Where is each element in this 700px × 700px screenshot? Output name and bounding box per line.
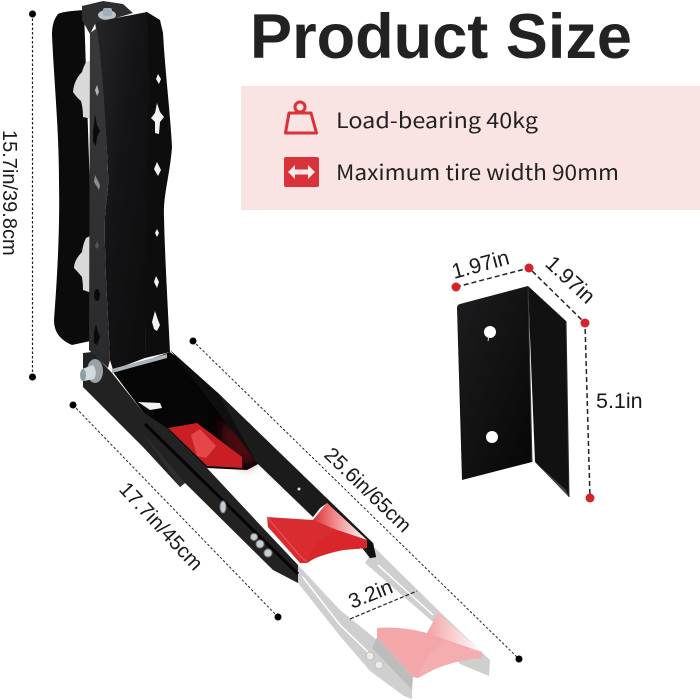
rail end tip — [367, 540, 376, 558]
silver tabs — [73, 60, 92, 293]
dimension: tire slot width — [345, 575, 417, 619]
column side strip — [89, 28, 110, 368]
white slot — [138, 402, 162, 410]
ghost red roller — [377, 613, 482, 678]
red reflection — [222, 418, 262, 468]
column right strip — [145, 12, 172, 358]
column front face — [95, 12, 149, 370]
slot in plate — [145, 424, 298, 574]
upper rail — [170, 350, 376, 558]
dimension: bracket measurements — [449, 245, 643, 502]
ghost left rail — [298, 565, 412, 699]
red roller front — [168, 423, 242, 468]
vertical column — [89, 12, 172, 370]
tire width text: Maximum tire width 90mm — [336, 157, 619, 187]
back plate — [52, 10, 95, 345]
horizontal arm — [80, 350, 376, 583]
sleeve step — [143, 412, 185, 487]
red roller middle — [267, 503, 367, 563]
dimension: collapsed arm length — [70, 402, 282, 620]
column holes left — [93, 85, 100, 345]
dimension: bracket measurements: 1.97in — [541, 251, 600, 309]
dimension: tire slot width: 3.2in — [345, 575, 396, 614]
top bracket and bolt — [82, 1, 133, 34]
arm bolts — [220, 501, 272, 557]
icon: tire width arrow — [284, 157, 319, 187]
bracket holes — [484, 326, 496, 338]
load-bearing text: Load-bearing 40kg — [336, 105, 538, 135]
ghost right rail — [365, 548, 490, 676]
icon: weight — [286, 102, 316, 133]
axle rod — [112, 354, 167, 373]
small L bracket — [457, 286, 569, 497]
ghost bolts — [366, 652, 383, 669]
dimension: bracket measurements: 1.97in — [449, 245, 512, 284]
arm interior — [113, 352, 260, 470]
pivot bolt — [80, 359, 103, 383]
ghost extended arm — [298, 548, 490, 699]
dimension: column height — [0, 10, 36, 380]
dimension: total arm length: 25.6in/65cm — [320, 443, 416, 537]
column holes right — [151, 74, 164, 331]
dimension: collapsed arm length: 17.7in/45cm — [114, 478, 207, 575]
panel: specifications — [241, 86, 700, 210]
bracket right face — [528, 286, 569, 497]
title: Product Size — [250, 2, 632, 72]
lower side plate — [83, 352, 298, 583]
dimension: bracket measurements: 5.1in — [596, 389, 643, 413]
rail rivet — [298, 488, 300, 490]
bracket left face — [457, 286, 532, 480]
dimension: total arm length — [190, 338, 522, 662]
